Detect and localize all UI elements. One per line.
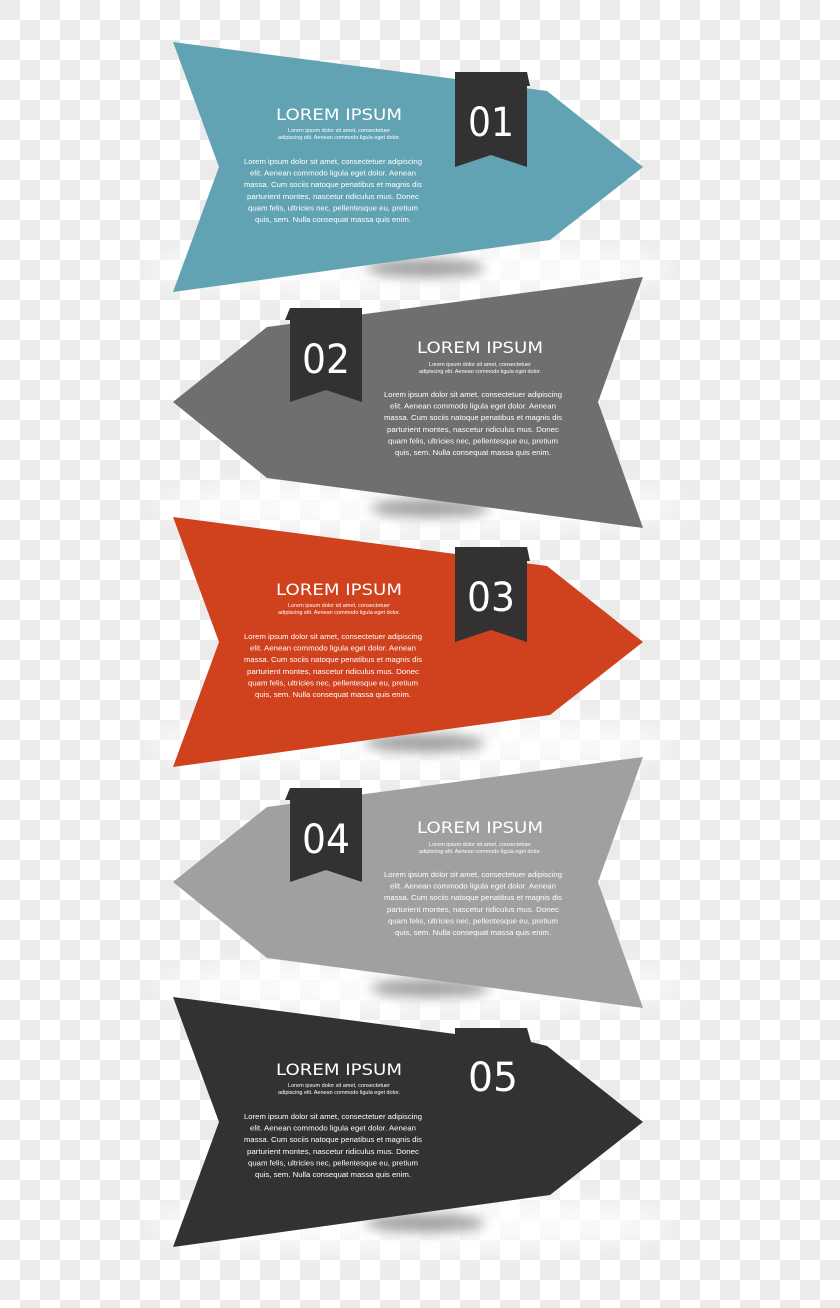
text 03: adipiscing elit. Aenean commodo ligula eget dolor.	[278, 610, 400, 616]
tag 02	[285, 308, 362, 402]
tag 02: 02	[302, 337, 350, 383]
text 05: elit. Aenean commodo ligula eget dolor. Aenean	[250, 1124, 416, 1133]
text 05: Lorem ipsum dolor sit amet, consectetuer	[288, 1083, 390, 1089]
text 01: quam felis, ultricies nec, pellentesque eu, pretium	[248, 203, 418, 212]
text 04: LOREM IPSUM	[417, 818, 543, 837]
text 02: quis, sem. Nulla consequat massa quis enim.	[395, 448, 551, 457]
banner 04	[173, 757, 643, 1008]
text 04: Lorem ipsum dolor sit amet, consectetuer	[429, 842, 531, 848]
text 04: massa. Cum sociis natoque penatibus et magnis dis	[384, 893, 562, 902]
text 04: adipiscing elit. Aenean commodo ligula eget dolor.	[419, 849, 541, 855]
text 05: quam felis, ultricies nec, pellentesque eu, pretium	[248, 1158, 418, 1167]
text 01: elit. Aenean commodo ligula eget dolor. Aenean	[250, 169, 416, 178]
text 02: elit. Aenean commodo ligula eget dolor. Aenean	[390, 402, 556, 411]
text 04: quam felis, ultricies nec, pellentesque eu, pretium	[388, 916, 558, 925]
banner 01	[173, 42, 643, 292]
tag 04: 04	[302, 817, 350, 863]
text 03: elit. Aenean commodo ligula eget dolor. Aenean	[250, 644, 416, 653]
text 03: quam felis, ultricies nec, pellentesque eu, pretium	[248, 678, 418, 687]
text 05	[244, 1060, 422, 1179]
text 05: adipiscing elit. Aenean commodo ligula eget dolor.	[278, 1090, 400, 1096]
text 05: massa. Cum sociis natoque penatibus et magnis dis	[244, 1135, 422, 1144]
text 02: LOREM IPSUM	[417, 338, 543, 357]
text 03: Lorem ipsum dolor sit amet, consectetuer adipiscing	[244, 632, 422, 641]
tag 01: 01	[468, 100, 514, 146]
text 04: quis, sem. Nulla consequat massa quis enim.	[395, 928, 551, 937]
text 03: parturient montes, nascetur ridiculus mus. Donec	[247, 667, 419, 676]
text 04: elit. Aenean commodo ligula eget dolor. Aenean	[390, 882, 556, 891]
text 01: Lorem ipsum dolor sit amet, consectetuer adipiscing	[244, 157, 422, 166]
text 05: LOREM IPSUM	[276, 1060, 402, 1079]
text 02: parturient montes, nascetur ridiculus mus. Donec	[387, 425, 559, 434]
text 04: Lorem ipsum dolor sit amet, consectetuer adipiscing	[384, 870, 562, 879]
text 04	[384, 818, 562, 937]
number 05: 05	[468, 1055, 518, 1101]
shadows	[140, 242, 690, 1249]
text 05: quis, sem. Nulla consequat massa quis enim.	[255, 1170, 411, 1179]
text 01: quis, sem. Nulla consequat massa quis enim.	[255, 215, 411, 224]
banner 02	[173, 277, 643, 528]
text 02: quam felis, ultricies nec, pellentesque eu, pretium	[388, 436, 558, 445]
text 01: Lorem ipsum dolor sit amet, consectetuer	[288, 128, 390, 134]
tag 01	[455, 72, 530, 167]
text 02: Lorem ipsum dolor sit amet, consectetuer adipiscing	[384, 390, 562, 399]
text 01: parturient montes, nascetur ridiculus mus. Donec	[247, 192, 419, 201]
text 03: quis, sem. Nulla consequat massa quis enim.	[255, 690, 411, 699]
tag 04	[285, 788, 362, 882]
text 03: LOREM IPSUM	[276, 580, 402, 599]
text 01: adipiscing elit. Aenean commodo ligula eget dolor.	[278, 135, 400, 141]
text 01	[244, 105, 422, 224]
text 02: adipiscing elit. Aenean commodo ligula eget dolor.	[419, 369, 541, 375]
text 02: massa. Cum sociis natoque penatibus et magnis dis	[384, 413, 562, 422]
text 02	[384, 338, 562, 457]
text 03	[244, 580, 422, 699]
text 03: Lorem ipsum dolor sit amet, consectetuer	[288, 603, 390, 609]
banner 05	[173, 997, 643, 1247]
text 05: parturient montes, nascetur ridiculus mus. Donec	[247, 1147, 419, 1156]
tag 03	[455, 547, 530, 642]
text 04: parturient montes, nascetur ridiculus mus. Donec	[387, 905, 559, 914]
text 03: massa. Cum sociis natoque penatibus et magnis dis	[244, 655, 422, 664]
banner 03	[173, 517, 643, 767]
text 01: massa. Cum sociis natoque penatibus et magnis dis	[244, 180, 422, 189]
text 05: Lorem ipsum dolor sit amet, consectetuer adipiscing	[244, 1112, 422, 1121]
text 01: LOREM IPSUM	[276, 105, 402, 124]
text 02: Lorem ipsum dolor sit amet, consectetuer	[429, 362, 531, 368]
tag 03: 03	[467, 575, 515, 621]
